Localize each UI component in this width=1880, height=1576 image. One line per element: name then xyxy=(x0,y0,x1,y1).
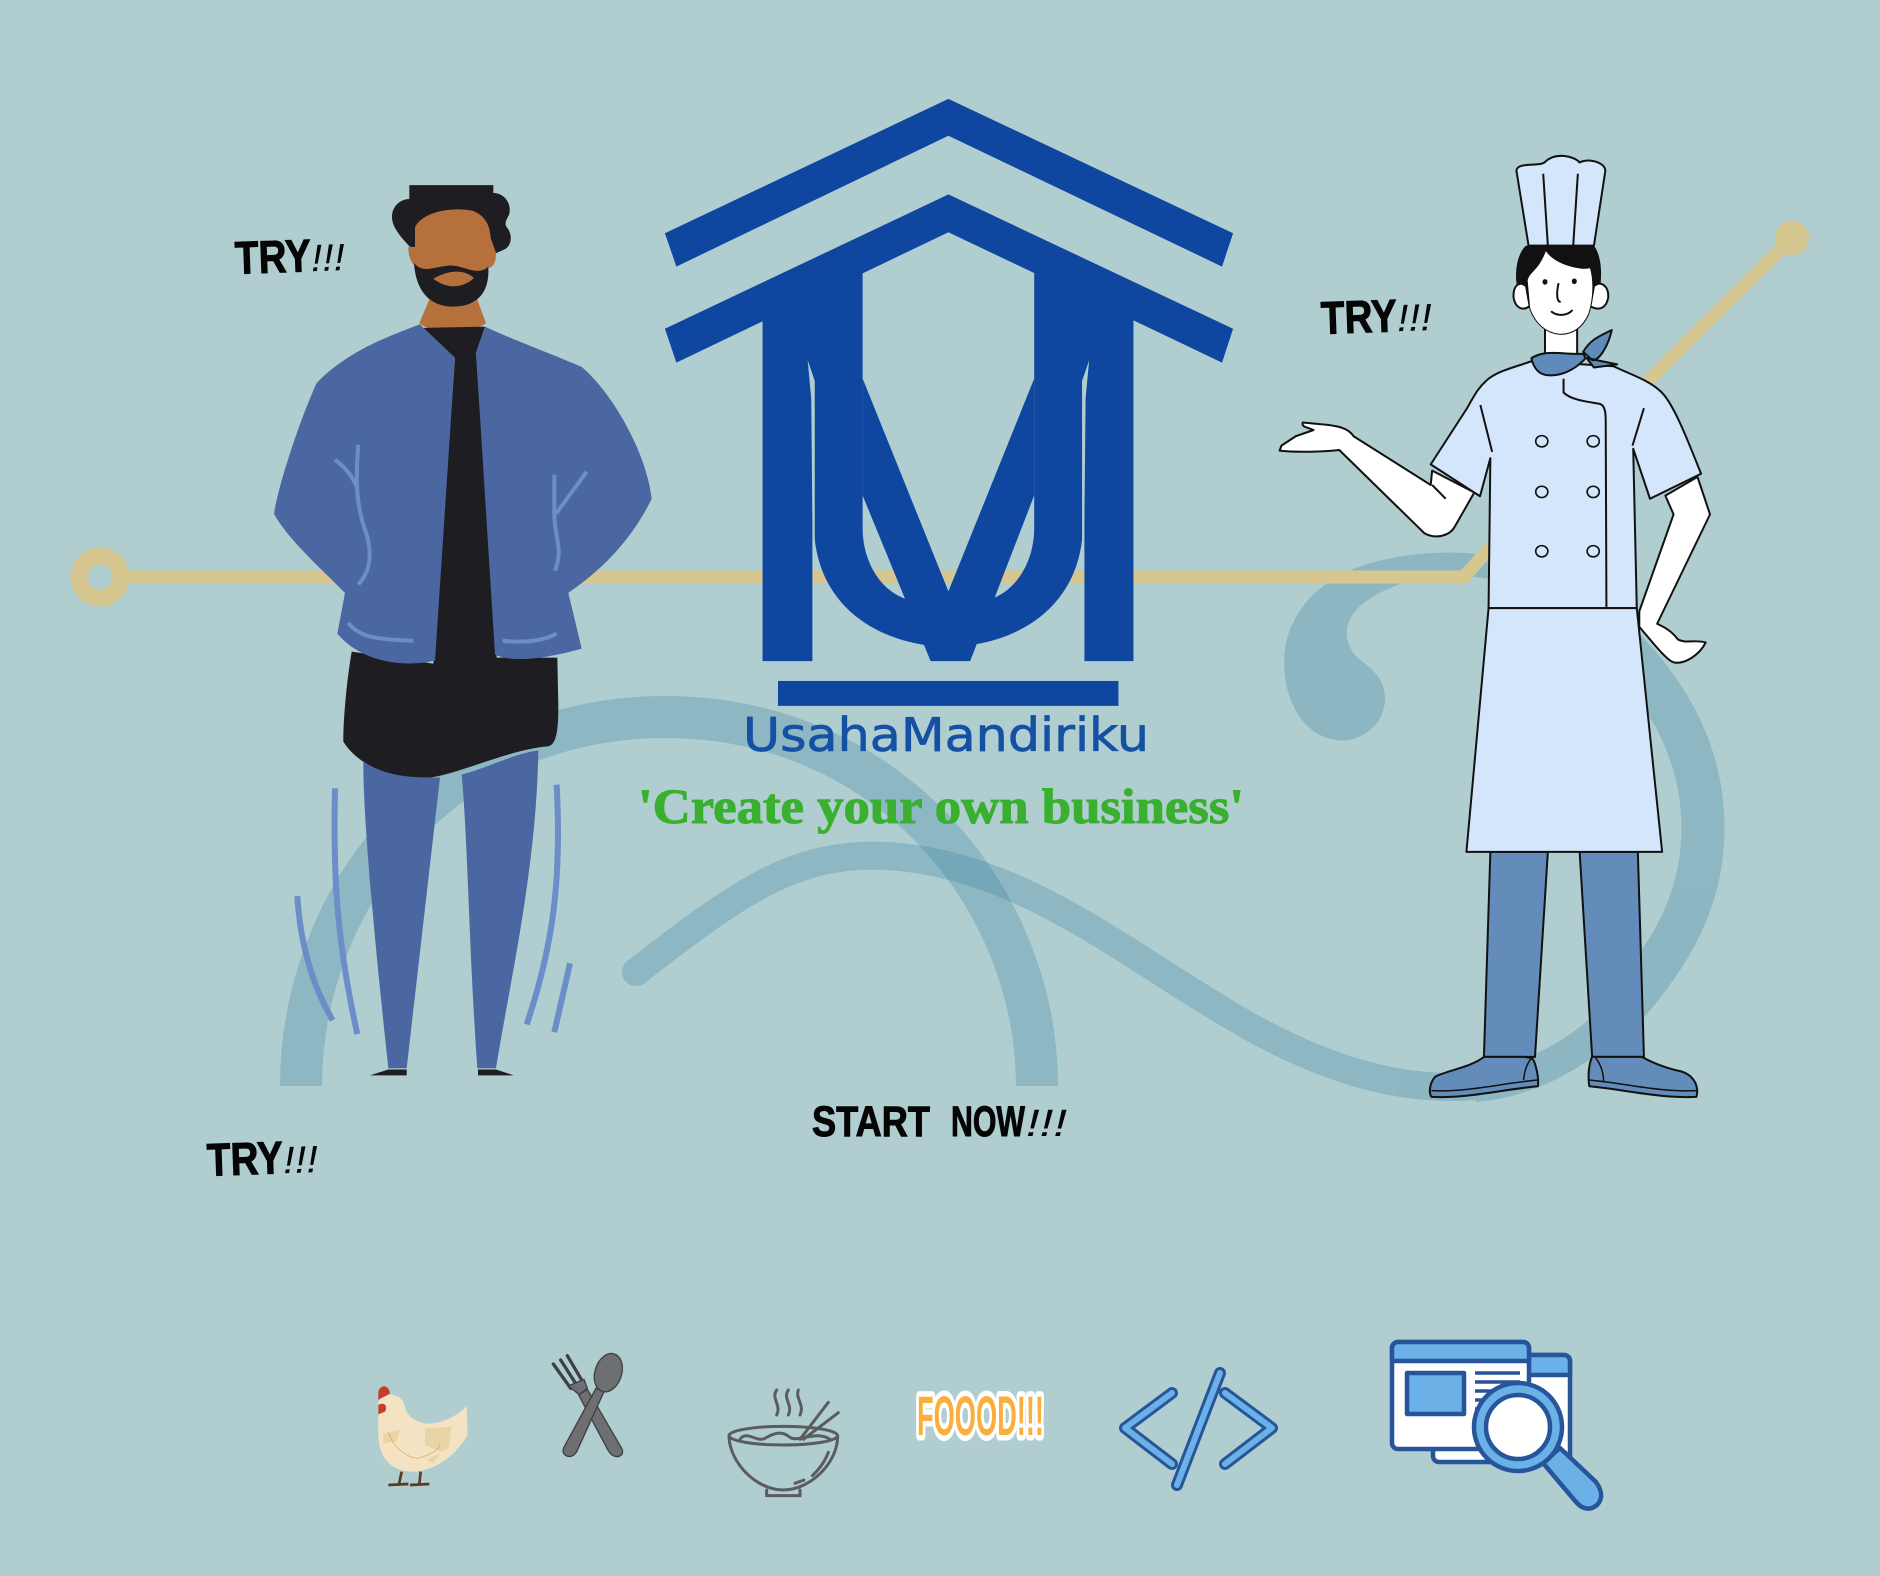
chicken legs xyxy=(388,1472,429,1485)
start now label: NOW xyxy=(951,1098,1025,1146)
monogram slivers xyxy=(808,360,1089,543)
man mouth xyxy=(433,272,474,286)
chef hair xyxy=(1516,246,1601,292)
man trousers xyxy=(363,751,538,1068)
teal arch xyxy=(301,717,1037,1086)
start now label xyxy=(812,1098,1068,1146)
icon: fork and spoon xyxy=(553,1350,627,1457)
chef nose and smile xyxy=(1551,283,1572,315)
chef hat xyxy=(1516,156,1605,246)
try label bottom left: TRY xyxy=(206,1131,284,1186)
teal wave and S curve xyxy=(636,553,1703,1087)
chef face xyxy=(1527,250,1593,334)
chicken wing patch xyxy=(383,1427,452,1463)
chef jacket xyxy=(1431,361,1701,608)
motion lines xyxy=(297,785,570,1034)
fork tines xyxy=(553,1356,583,1388)
chef jacket seams xyxy=(1432,379,1644,608)
front window xyxy=(1392,1342,1529,1449)
chef buttons xyxy=(1536,436,1599,557)
try label right: TRY xyxy=(1320,289,1398,344)
U shape xyxy=(814,264,1083,647)
chicken comb and wattle xyxy=(378,1386,390,1414)
chicken body xyxy=(378,1395,468,1472)
bowl body xyxy=(729,1437,838,1496)
upper roof xyxy=(665,99,1233,267)
brand name: UsahaMandiriku xyxy=(743,708,1149,762)
illustration: man in blue jacket xyxy=(274,185,652,1075)
man left jacket xyxy=(274,324,455,663)
chef shoes xyxy=(1430,1057,1697,1097)
icon: code brackets xyxy=(1125,1373,1272,1485)
man beard xyxy=(414,263,488,307)
magnifier handle xyxy=(1543,1448,1601,1509)
man hair xyxy=(392,185,511,256)
chef shoe details xyxy=(1431,1058,1696,1091)
bowl rim xyxy=(729,1426,838,1445)
lower roof xyxy=(665,194,1233,363)
try label right: !!! xyxy=(1396,297,1433,340)
man right jacket xyxy=(476,327,652,659)
fork head xyxy=(568,1379,587,1395)
chef neck xyxy=(1545,327,1577,358)
man shoes xyxy=(370,1069,514,1075)
fork handle xyxy=(579,1389,623,1457)
man face xyxy=(408,209,496,283)
logo mark: house with UM monogram xyxy=(665,99,1233,706)
chef right arm xyxy=(1639,477,1710,663)
chef left arm xyxy=(1280,422,1474,536)
chopsticks xyxy=(800,1402,838,1439)
spoon handle xyxy=(563,1388,604,1456)
back window xyxy=(1433,1355,1570,1462)
icon: web page search xyxy=(1392,1342,1601,1509)
try label top left: !!! xyxy=(310,237,346,280)
tagline: 'Create your own business' xyxy=(638,778,1244,834)
magnifier lens xyxy=(1474,1383,1562,1471)
text lines xyxy=(1475,1373,1520,1409)
chef ears xyxy=(1514,284,1608,309)
spoon bowl xyxy=(590,1350,627,1395)
decorative teal swirl lines xyxy=(301,553,1703,1087)
try label bottom left: !!! xyxy=(282,1139,319,1182)
man neck xyxy=(419,298,486,332)
noodles xyxy=(740,1433,830,1439)
icon: chicken xyxy=(378,1386,468,1485)
T stems xyxy=(763,274,1133,661)
start now label: !!! xyxy=(1026,1103,1068,1145)
base bar xyxy=(778,681,1118,706)
try label top left: TRY xyxy=(234,229,312,284)
chef eyes xyxy=(1542,279,1547,285)
image placeholder xyxy=(1407,1373,1464,1414)
steam xyxy=(775,1390,801,1415)
jacket seams xyxy=(335,445,587,642)
chef scarf xyxy=(1531,330,1617,375)
chicken wing line xyxy=(388,1432,440,1458)
chef trousers xyxy=(1484,852,1644,1057)
icon: noodle bowl xyxy=(729,1390,838,1496)
V shape xyxy=(863,378,1034,661)
illustration: chef xyxy=(1280,156,1710,1097)
start now label: START xyxy=(812,1098,930,1146)
chef apron xyxy=(1466,608,1662,852)
man shirt xyxy=(343,327,558,779)
text: FOOOD!!! xyxy=(917,1384,1044,1447)
gold connector line with ring and dot ends xyxy=(79,221,1809,598)
